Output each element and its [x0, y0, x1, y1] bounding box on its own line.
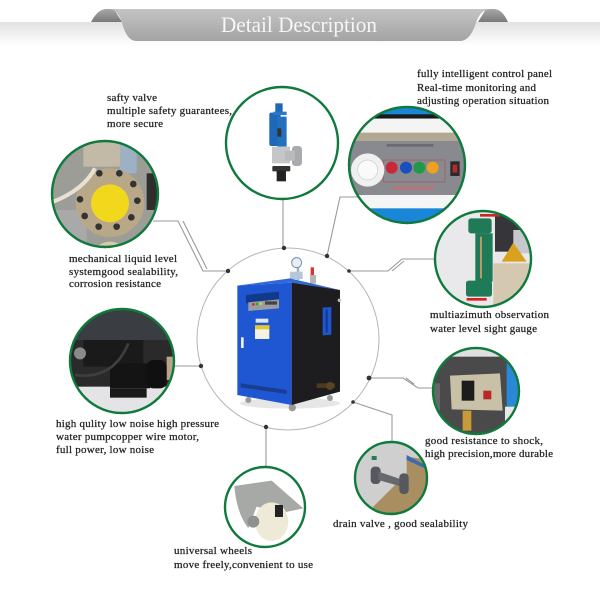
text: pump — [56, 418, 219, 456]
boiler illustration — [237, 258, 341, 411]
text: control panel: fully intelligent control panel — [417, 68, 552, 80]
text: pump: high qulity low noise high pressure — [56, 418, 219, 430]
text: control panel — [417, 68, 552, 107]
connector: safety valve — [282, 199, 286, 250]
text: wheel: universal wheels — [174, 545, 252, 557]
photo: wheel — [225, 467, 305, 547]
text: mechanical liquid level: mechanical liquid level — [69, 253, 177, 265]
text: wheel — [174, 545, 313, 571]
photo: drain valve — [355, 442, 430, 517]
connector: pressure switch — [367, 376, 433, 388]
text: pressure switch: high precision,more durable — [425, 448, 553, 460]
connector: sight gauge — [347, 259, 435, 273]
photo: pressure switch — [430, 347, 520, 434]
text: control panel: adjusting operation situation — [417, 95, 550, 107]
text: sight gauge: multiazimuth observation — [430, 309, 550, 321]
text: pump: water pumpcopper wire motor, — [56, 431, 199, 443]
connector: liquid level — [153, 221, 230, 273]
text: pump: full power, low noise — [56, 444, 154, 456]
connector: pump — [175, 364, 203, 368]
photo: control panel — [347, 107, 470, 225]
text: sight gauge — [430, 309, 550, 335]
text: safety valve: safty valve — [107, 92, 157, 104]
photo: safety valve — [226, 87, 338, 199]
connector: wheels — [264, 425, 268, 467]
central ring — [197, 248, 379, 430]
connector: control panel — [325, 197, 358, 258]
text: control panel: Real-time monitoring and — [417, 82, 536, 94]
text: wheel: move freely,convenient to use — [174, 559, 313, 571]
text: safety valve — [107, 92, 232, 130]
text: pressure switch: good resistance to shock, — [425, 435, 543, 447]
text: drain valve: drain valve , good sealability — [333, 518, 468, 530]
title: Detail Description — [221, 12, 377, 37]
text: mechanical liquid level — [69, 253, 178, 290]
text: safety valve: multiple safety guarantees, — [107, 105, 232, 117]
connector: drain valve — [351, 400, 392, 442]
photo: sight gauge — [433, 210, 533, 310]
text: mechanical liquid level: systemgood sealability, — [69, 266, 178, 278]
photo: pump — [68, 307, 178, 417]
title banner — [0, 9, 600, 46]
text: pressure switch — [425, 435, 553, 460]
photo: mechanical liquid level — [50, 137, 163, 250]
text: safety valve: more secure — [107, 118, 163, 130]
text: mechanical liquid level: corrosion resistance — [69, 278, 161, 290]
text: sight gauge: water level sight gauge — [430, 323, 537, 335]
